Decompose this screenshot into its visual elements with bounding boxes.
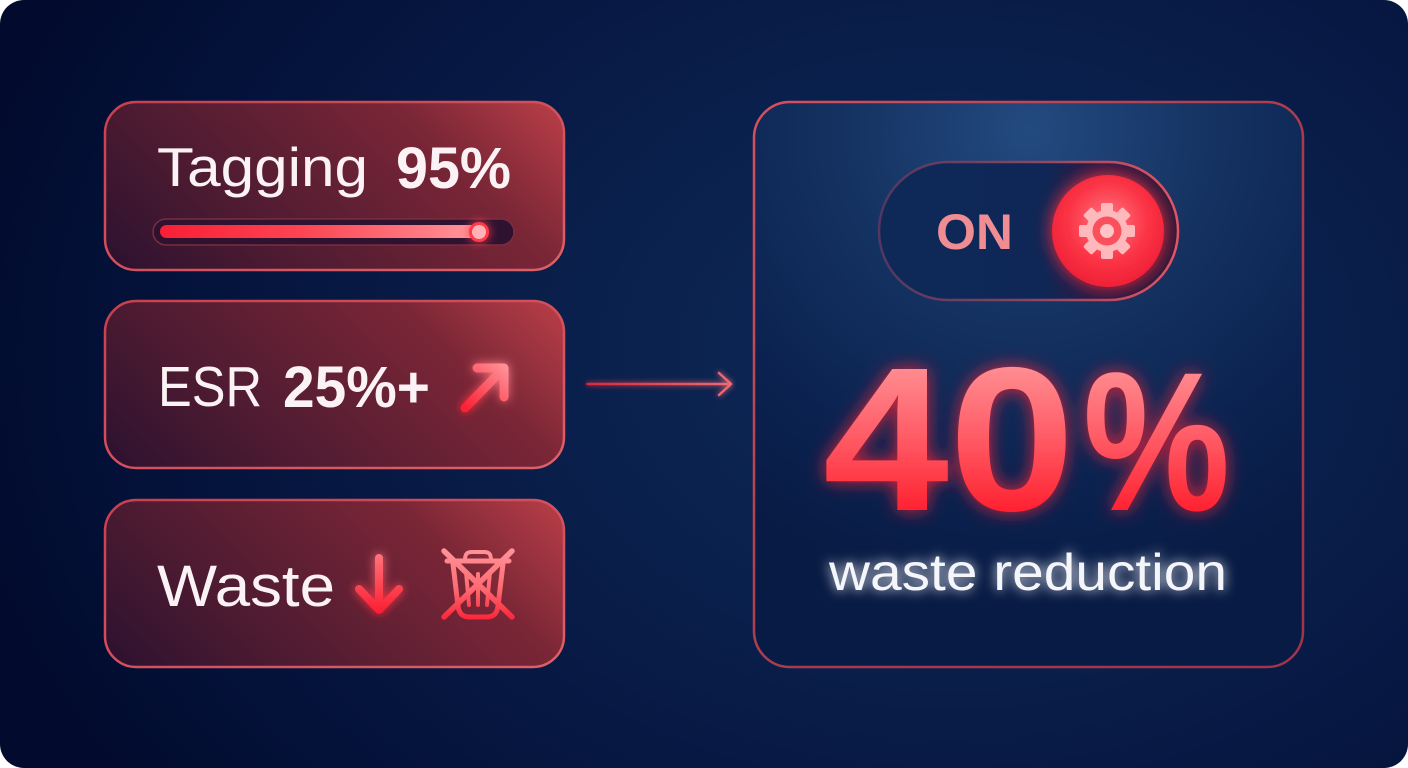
toggle label: ON <box>936 204 1013 260</box>
esr value: 25%+ <box>283 355 430 420</box>
panel: waste <box>105 500 564 667</box>
big number: 40 <box>823 325 1075 554</box>
icon: crossed-out trash can <box>444 551 512 617</box>
toggle knob <box>1052 175 1164 287</box>
big number <box>823 325 1230 554</box>
tagging label: Tagging <box>157 136 368 198</box>
toggle switch <box>879 162 1178 300</box>
icon: up-right arrow <box>465 368 504 408</box>
esr label: ESR <box>158 355 262 419</box>
progress bar <box>153 219 514 245</box>
icon: gear <box>1079 203 1135 259</box>
waste label: Waste <box>157 554 335 619</box>
panel: tagging <box>105 102 564 270</box>
arrow: connector <box>588 373 731 395</box>
caption: waste reduction <box>828 544 1227 602</box>
panel: esr <box>105 301 564 468</box>
icon: down arrow <box>359 558 399 610</box>
tagging value: 95% <box>396 136 511 201</box>
big number: % <box>1083 331 1230 552</box>
panel: result <box>754 102 1303 667</box>
